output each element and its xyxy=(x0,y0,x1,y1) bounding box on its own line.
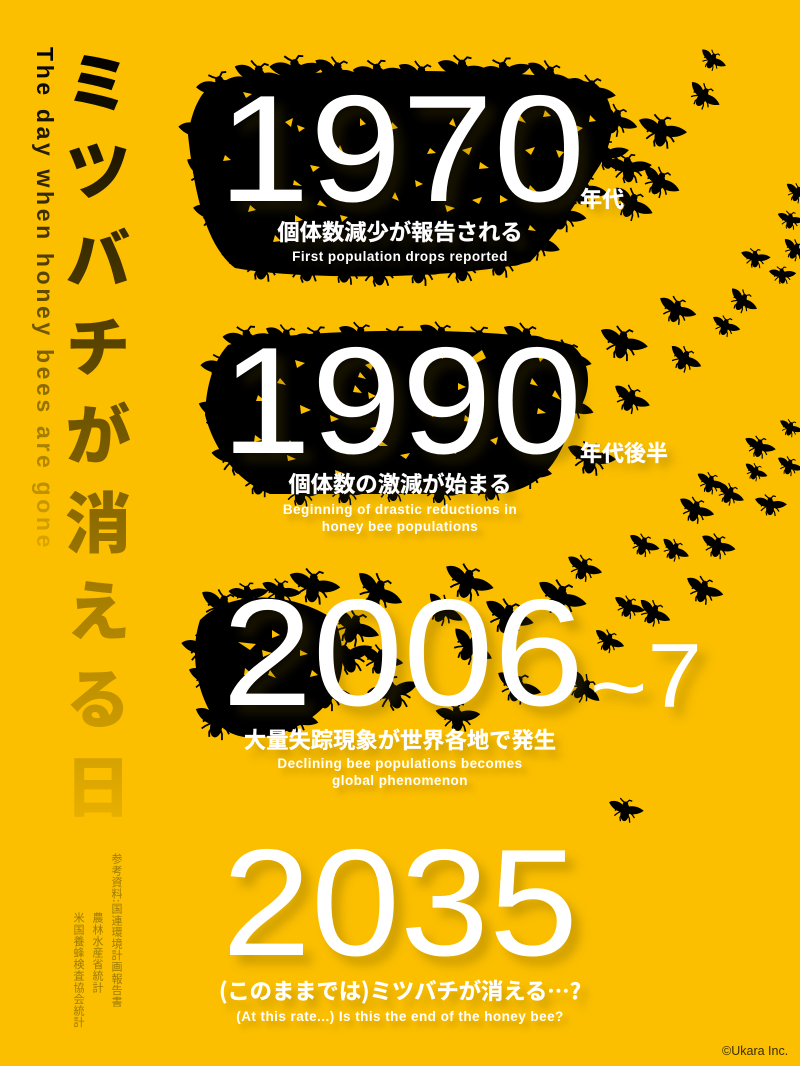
source line 1: 参考資料:国連環境計画報告書 xyxy=(109,853,125,1007)
subtitle: The day when honey bees are gone: The day when honey bees are gone xyxy=(32,47,58,551)
caption EN 1970: First population drops reported xyxy=(292,249,508,264)
year 1990: 1990 xyxy=(221,316,582,486)
bee cluster: 1970 xyxy=(177,50,642,290)
bee cluster: 1990 xyxy=(196,319,617,507)
year 2035: 2035 xyxy=(222,818,578,988)
caption JP 2006: 大量失踪現象が世界各地で発生 xyxy=(244,723,556,755)
caption JP 1990: 個体数の激減が始まる xyxy=(288,467,511,499)
scattered bees flying away xyxy=(590,46,800,824)
bee cluster: 2006 xyxy=(181,552,607,743)
source line 2: 農林水産省統計 xyxy=(90,912,106,993)
caption EN 1990: honey bee populations xyxy=(322,519,478,534)
unit: 年代: 年代 xyxy=(580,182,624,214)
caption JP 1970: 個体数減少が報告される xyxy=(277,215,523,247)
caption EN 1990 xyxy=(283,502,522,540)
caption EN 1990: Beginning of drastic reductions in xyxy=(283,502,517,517)
title: ミツバチが消える日: ミツバチが消える日 xyxy=(50,49,146,841)
copyright: ©Ukara Inc. xyxy=(722,1044,788,1058)
caption EN 2006 xyxy=(277,756,527,794)
year 1970: 1970 xyxy=(218,64,585,234)
sources xyxy=(71,853,125,1028)
year 2006: 2006 xyxy=(222,568,584,738)
unit: 年代後半: 年代後半 xyxy=(580,436,668,468)
year suffix ~7: ~7 xyxy=(590,626,702,738)
caption EN 2006: global phenomenon xyxy=(332,773,468,788)
caption EN 2006: Declining bee populations becomes xyxy=(277,756,523,771)
source line 3: 米国養蜂検査協会統計 xyxy=(71,912,87,1028)
caption EN 2035: (At this rate...) Is this the end of the honey bee? xyxy=(236,1009,564,1024)
caption JP 2035: (このままでは)ミツバチが消える…? xyxy=(219,974,581,1006)
